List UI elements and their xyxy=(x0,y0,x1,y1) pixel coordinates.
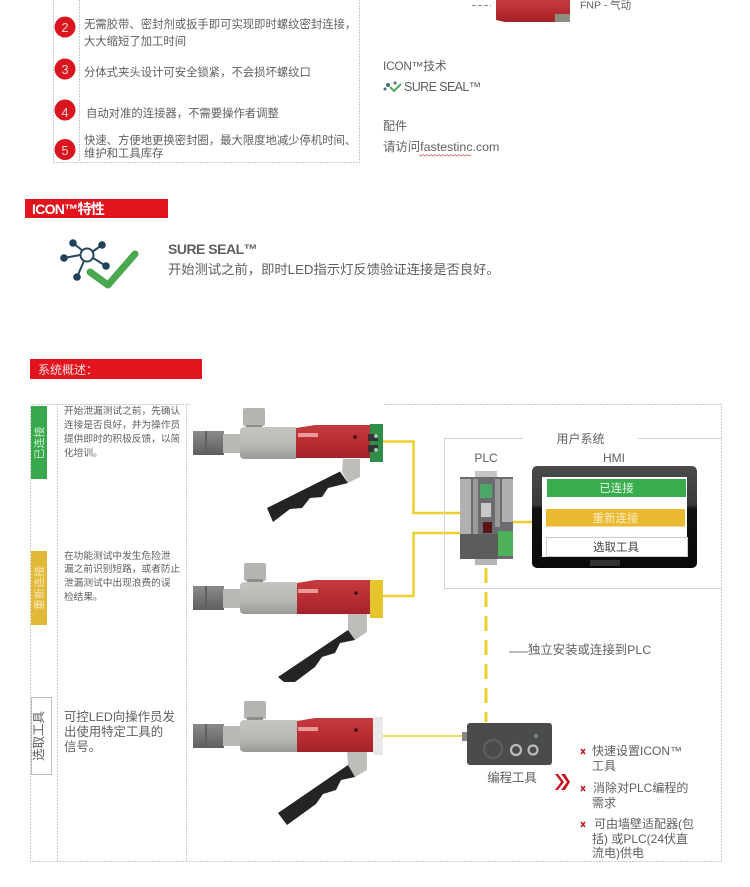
icon: sure seal network and check xyxy=(60,239,135,285)
text block: reconnect description: 在功能测试中发生危险泄 xyxy=(64,549,171,562)
HMI button: connected xyxy=(547,479,686,497)
item 5 xyxy=(54,133,356,160)
image: red gun fragment with FNP label xyxy=(472,0,631,22)
text block: connected description: 开始泄漏测试之前，先确认 xyxy=(64,404,181,417)
text block: connected description: 化培训。 xyxy=(64,446,103,459)
status tag: select tool xyxy=(32,698,52,774)
text block: ICON technology: SURE SEAL™ xyxy=(404,80,481,94)
item 5: 快速、方便地更换密封圈，最大限度地减少停机时间、 xyxy=(84,133,356,147)
text block: accessories xyxy=(383,119,499,156)
status tag: reconnect xyxy=(31,551,47,625)
connection lines xyxy=(383,442,532,736)
icon: small sure seal xyxy=(384,82,401,91)
status tag: connected xyxy=(31,406,47,479)
item 3 xyxy=(54,58,311,80)
text block: connected description: 连接是否良好，并为操作员 xyxy=(64,418,181,431)
bullet 3: 可由墙壁适配器(包 xyxy=(594,816,694,831)
HMI button: select tool xyxy=(546,538,688,556)
item 3: 分体式夹头设计可安全锁紧，不会损坏螺纹口 xyxy=(84,65,311,79)
image: programming tool: 编程工具 xyxy=(487,770,537,785)
text block: accessories: 配件 xyxy=(383,119,407,133)
bullet 1: 工具 xyxy=(592,759,616,773)
item 4: 自动对准的连接器，不需要操作者调整 xyxy=(86,106,279,120)
bullet 1 xyxy=(581,744,682,773)
text block: select tool description: 出使用特定工具的 xyxy=(64,724,163,739)
bullet 1: 快速设置ICON™ xyxy=(592,744,682,758)
bullet 2 xyxy=(581,780,688,810)
panel: user system: HMI xyxy=(603,451,625,465)
text block: sure seal description xyxy=(168,241,500,277)
image: PLC controller xyxy=(460,471,513,565)
heading: system overview xyxy=(30,359,202,379)
text block: select tool description xyxy=(64,709,175,754)
image: programming tool xyxy=(462,723,552,785)
text block: reconnect description: 检结果。 xyxy=(64,590,103,603)
text block: ICON technology: ICON™技术 xyxy=(383,59,447,73)
text block: select tool description: 可控LED向操作员发 xyxy=(64,709,175,724)
item 5: 维护和工具库存 xyxy=(84,146,163,160)
text block: select tool description: 信号。 xyxy=(64,740,101,754)
bullet 3: 括) 或PLC(24伏直 xyxy=(592,831,688,846)
panel: user system xyxy=(444,431,721,588)
bullet 3 xyxy=(581,816,694,860)
panel: system frame xyxy=(30,404,722,862)
HMI button: connected: 已连接 xyxy=(599,481,634,495)
item 2: 2 xyxy=(61,20,69,35)
icon: red chevrons xyxy=(555,774,570,790)
text block: reconnect description xyxy=(64,549,181,603)
list: programming tool benefits xyxy=(581,744,694,860)
text block: sure seal description: SURE SEAL™ xyxy=(168,241,257,257)
bullet 2: 需求 xyxy=(592,796,616,810)
text block: connected description: 提供即时的积极反馈，以简 xyxy=(64,432,180,445)
text block: ICON technology xyxy=(383,59,481,94)
status tag: select tool: 选取工具 xyxy=(32,711,46,761)
bullet 3: 流电)供电 xyxy=(592,846,644,860)
text block: reconnect description: 漏之前识别短路，或者防止 xyxy=(64,562,181,575)
item 5: 5 xyxy=(61,143,69,158)
item 2 xyxy=(54,16,356,48)
annotation: standalone or PLC connection: 独立安装或连接到PLC xyxy=(528,642,651,657)
panel: user system: 用户系统 xyxy=(556,431,605,446)
image: gun with green LED xyxy=(193,408,383,522)
text block: connected description xyxy=(64,404,181,459)
HMI button: reconnect xyxy=(546,509,685,526)
HMI button: reconnect: 重新连接 xyxy=(592,511,639,525)
bullet 2: 消除对PLC编程的 xyxy=(593,780,688,795)
heading: ICON features xyxy=(25,199,168,218)
text block: sure seal description: 开始测试之前，即时LED指示灯反馈验证连接是否良好。 xyxy=(168,261,500,277)
item 4 xyxy=(54,100,279,120)
image: gun with white LED xyxy=(193,701,383,825)
heading: ICON features: ICON™特性 xyxy=(32,201,105,217)
HMI button: select tool: 选取工具 xyxy=(593,541,639,554)
panel: user system: PLC xyxy=(474,451,498,465)
status tag: connected: 已连接 xyxy=(33,426,46,460)
panel: advantages list xyxy=(54,0,360,162)
item 4: 4 xyxy=(61,105,69,120)
item 2: 无需胶带、密封剂或扳手即可实现即时螺纹密封连接， xyxy=(84,17,356,31)
item 2: 大大缩短了加工时间 xyxy=(84,34,186,48)
text block: accessories: 请访问fastestinc.com xyxy=(383,140,499,154)
status tag: reconnect: 重新连接 xyxy=(32,566,46,610)
item 3: 3 xyxy=(61,62,69,77)
image: HMI touch panel xyxy=(532,466,697,568)
heading: system overview: 系统概述： xyxy=(38,363,98,377)
image: gun with yellow LED xyxy=(193,563,383,682)
text block: reconnect description: 泄漏测试中出现浪费的误 xyxy=(64,576,171,589)
